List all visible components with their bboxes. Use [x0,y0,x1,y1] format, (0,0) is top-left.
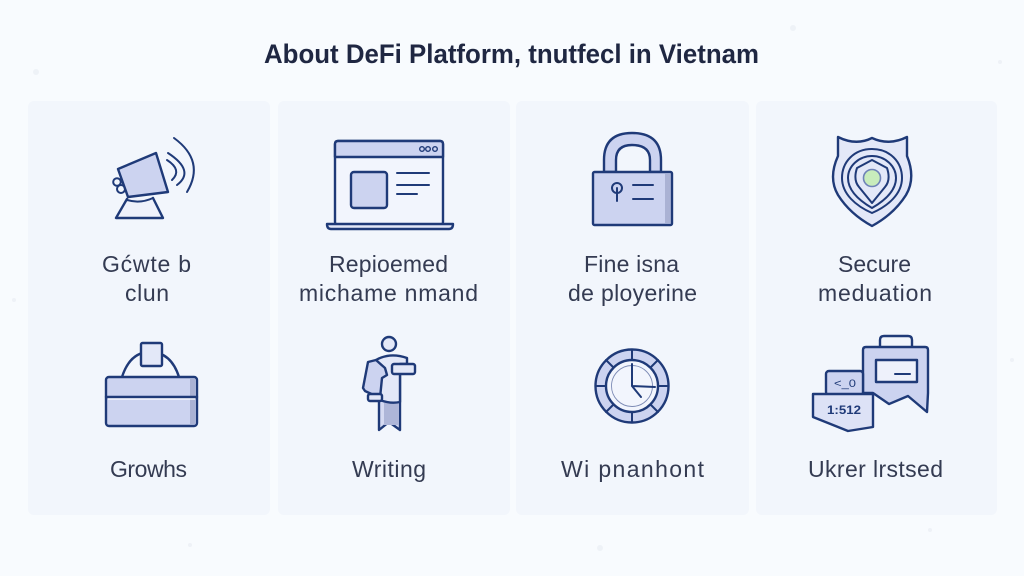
label: Secure meduation [818,251,932,306]
label: Gćwte b clun [102,251,191,306]
icon: figure with ribbon [363,337,415,430]
label: Repioemed michame nmand: michame nmand [299,280,478,306]
label: Repioemed michame nmand [299,251,478,306]
panel: column 2 [278,101,510,515]
icon: megaphone speaker [113,138,194,218]
label: Gćwte b clun: Gćwte b [102,251,191,277]
label: Fine isna de ployerine: Fine isna [584,251,679,277]
icon: laptop window [327,141,453,229]
label: Fine isna de ployerine [568,251,697,306]
label: Secure meduation: Secure [838,251,911,277]
icon: chat bubbles and cards: 1:512 [827,403,861,417]
icon: chat bubbles and cards [813,336,928,431]
label: Gćwte b clun: clun [125,280,169,306]
panel: column 4 [756,101,997,515]
label: Secure meduation: meduation [818,280,932,306]
label: Fine isna de ployerine: de ployerine [568,280,697,306]
label: Writing: Writing [352,456,426,482]
label: Growhs: Growhs [110,456,187,482]
title: About DeFi Platform, tnutfecl in Vietnam [264,39,759,69]
panel: column 1 [28,101,270,515]
panel: column 3 [516,101,749,515]
icon: padlock [593,133,672,225]
icon: clock [596,350,668,422]
icon: shield [833,137,911,226]
label: Repioemed michame nmand: Repioemed [329,251,448,277]
label: Wi pnanhont: Wi pnanhont [561,456,705,482]
icon: toolbox bag [106,343,197,426]
icon: chat bubbles and cards: <_0 [834,378,856,390]
label: Ukrer lrstsed: Ukrer lrstsed [808,456,943,482]
